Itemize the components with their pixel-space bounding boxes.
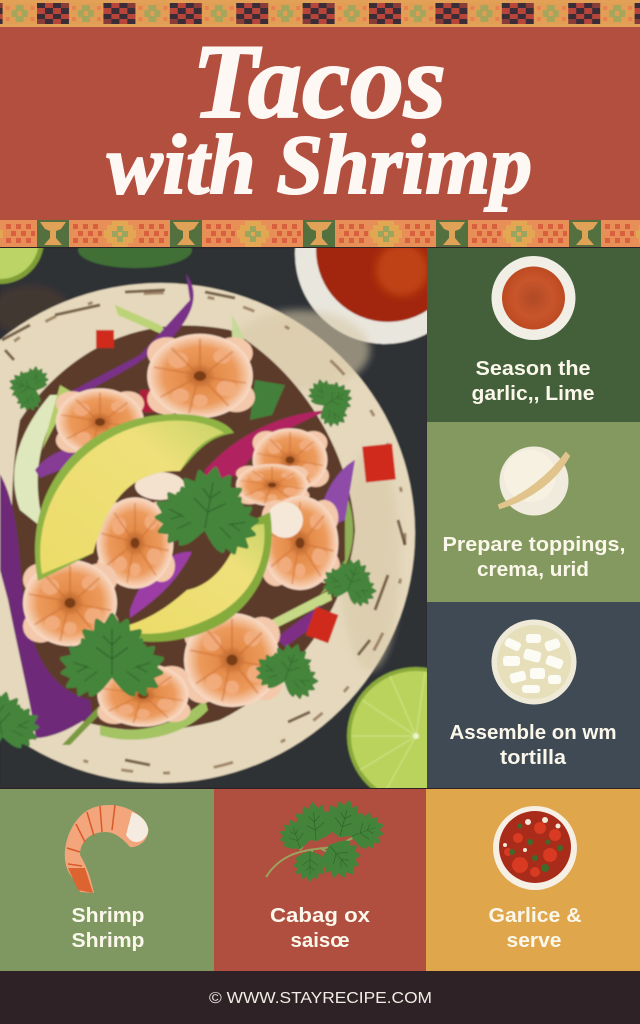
title: Tacos <box>192 23 446 140</box>
header background <box>0 27 640 220</box>
step text: garlic,, Lime <box>472 382 594 405</box>
cilantro <box>0 357 388 762</box>
cucumber and greens <box>14 305 353 745</box>
panel: taco photo <box>0 248 427 788</box>
icon: salsa bowl <box>493 806 577 890</box>
icon: shrimp <box>65 805 148 893</box>
step text <box>472 357 594 405</box>
step text: crema, urid <box>477 558 589 581</box>
purple cabbage left <box>0 474 92 738</box>
ingredient label <box>72 904 144 952</box>
step text <box>450 721 616 769</box>
purple cabbage strips <box>35 274 355 647</box>
ingredient label: serve <box>506 929 562 952</box>
ingredient label: Shrimp <box>72 904 144 927</box>
panel: assemble step <box>427 602 640 788</box>
ingredient label: Shrimp <box>72 929 144 952</box>
lime bottom right <box>346 666 427 788</box>
avocado slices <box>35 414 272 642</box>
tortilla <box>0 283 415 783</box>
ingredient label: Garlice & <box>488 904 582 927</box>
icon: spice bowl <box>492 256 576 340</box>
top patterned border <box>0 0 640 27</box>
step text: Season the <box>476 357 590 380</box>
panel: toppings step <box>427 422 640 602</box>
ingredient label <box>488 904 582 952</box>
panel: salsa ingredient <box>426 789 640 971</box>
footer <box>0 971 640 1024</box>
filling base <box>12 326 355 730</box>
ingredient label: Cabag ox <box>270 904 371 927</box>
step text: Assemble on wm <box>450 721 616 744</box>
ingredient label: saisœ <box>290 929 350 952</box>
salsa bowl <box>294 248 427 346</box>
shrimp <box>23 334 340 727</box>
step text <box>442 533 626 581</box>
icon: cilantro sprig <box>266 797 388 885</box>
step text: Prepare toppings, <box>442 533 626 556</box>
lime top left <box>0 248 44 286</box>
panel: season step <box>427 248 640 422</box>
lower patterned border <box>0 220 640 247</box>
step text: tortilla <box>500 746 567 769</box>
panel: cabbage ingredient <box>214 789 426 971</box>
title <box>107 23 532 212</box>
title: with Shrimp <box>107 118 532 212</box>
red pepper pieces <box>96 330 396 643</box>
footer: © WWW.STAYRECIPE.COM <box>209 990 432 1007</box>
ingredient label <box>270 904 371 952</box>
basil leaf top <box>77 248 193 269</box>
panel: shrimp ingredient <box>0 789 214 971</box>
icon: onion bowl <box>492 620 576 704</box>
icon: crema bowl <box>499 446 569 516</box>
